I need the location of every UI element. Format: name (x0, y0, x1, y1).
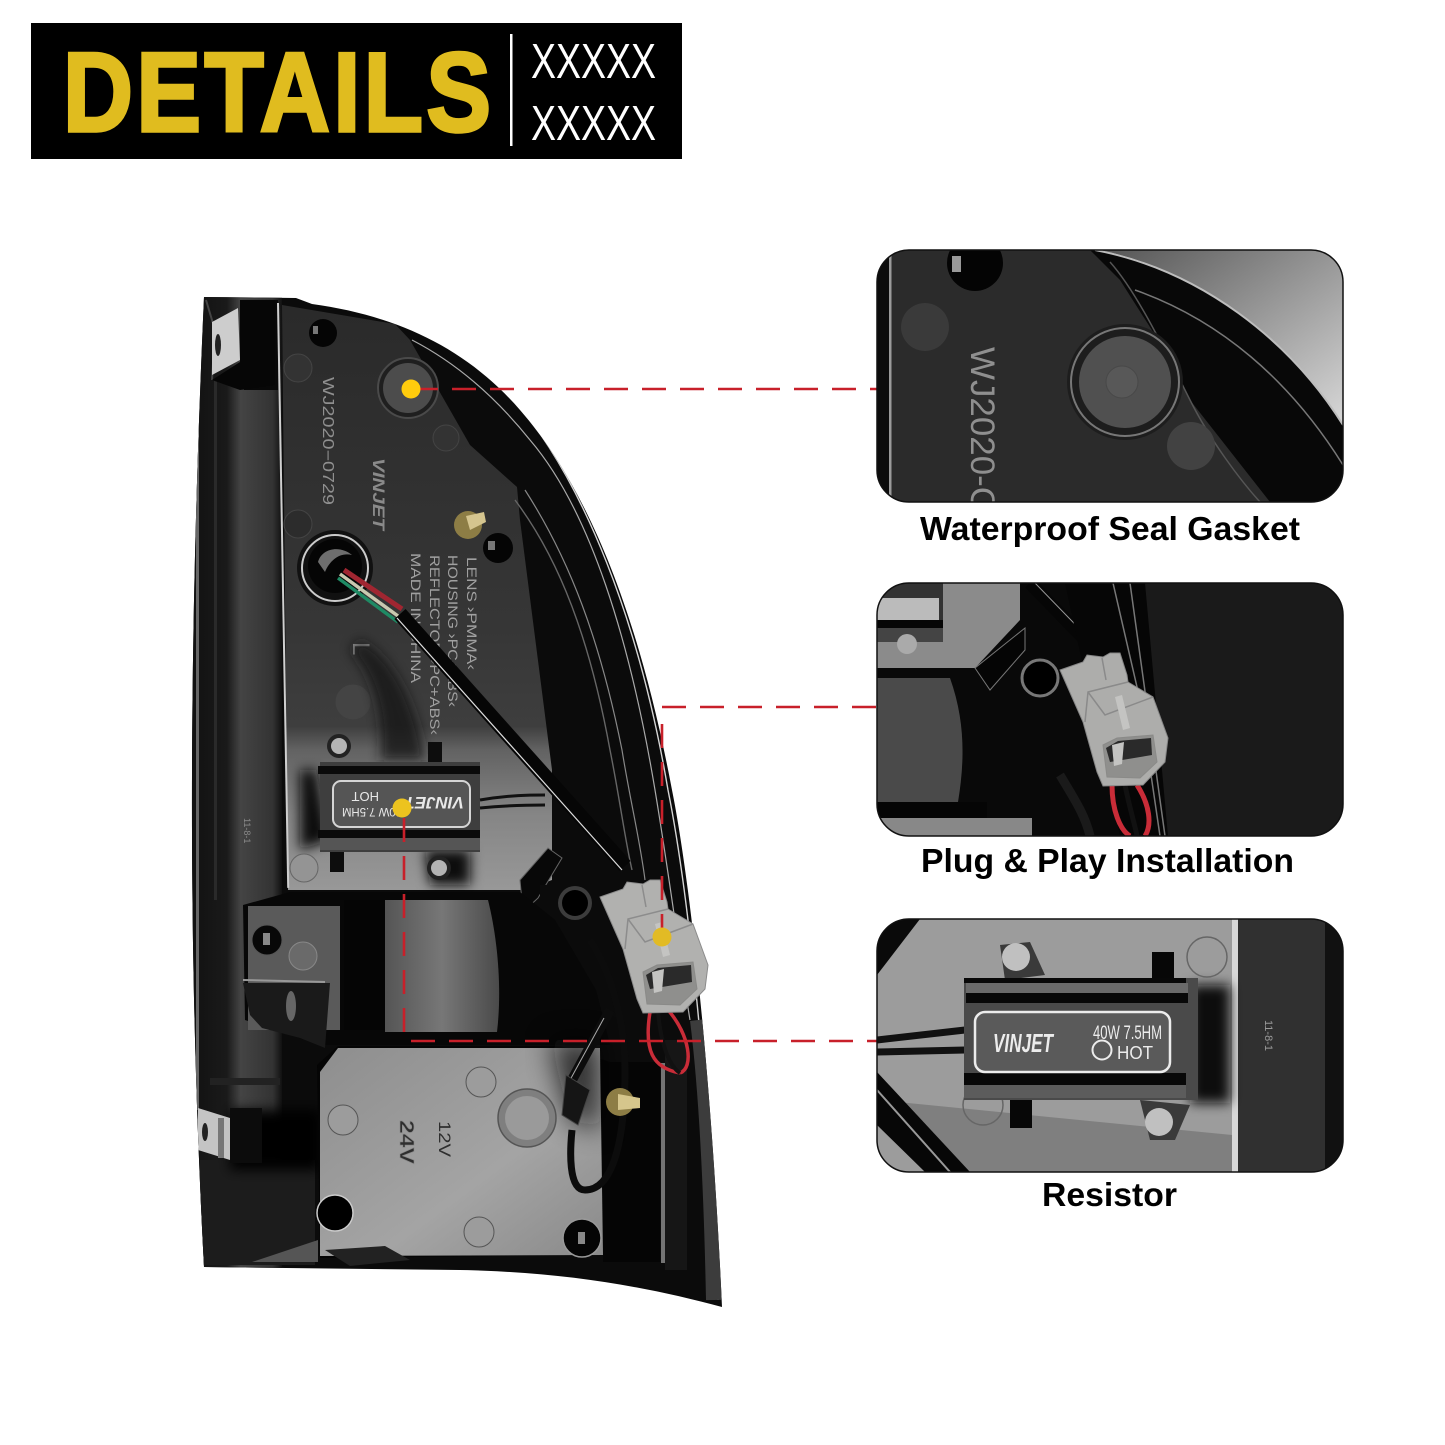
callout line: resistor (404, 818, 877, 1041)
tilted rib and socket (520, 848, 592, 920)
panel: resistor: 40W 7.5HM (1093, 1023, 1162, 1044)
left housing strip: 11-8-1 (242, 818, 252, 843)
wires (338, 570, 402, 622)
lower hinge (198, 1108, 262, 1163)
embossed material text: LENS ›PMMA‹ (464, 557, 479, 670)
title: DETAILS: DETAILS (63, 30, 494, 156)
header banner (31, 23, 682, 159)
panel: waterproof seal gasket (877, 235, 1343, 512)
resistor in housing: VINJET (403, 793, 464, 812)
marker dot: gasket (402, 380, 420, 398)
grey connector (600, 880, 708, 1013)
embossed material text: MADE IN CHINA (408, 553, 423, 683)
label: plug and play: Plug & Play Installation (921, 842, 1294, 879)
upper panel (282, 305, 552, 890)
label: resistor: Resistor (1042, 1176, 1177, 1213)
resistor in housing (290, 734, 545, 885)
placeholder text line 1: XXXXX (531, 35, 656, 89)
cable grommet (297, 530, 373, 606)
header divider (510, 34, 512, 146)
callout line: waterproof seal gasket (414, 388, 877, 390)
embossed material text: HOUSING ›PC+ABS‹ (445, 555, 460, 707)
left housing strip (190, 296, 320, 1271)
panel: resistor (877, 919, 1343, 1172)
product: tail light rear view (190, 296, 722, 1307)
stud nut (454, 511, 513, 563)
panel letter L: L (347, 642, 374, 655)
marker dot: resistor (392, 798, 412, 818)
placeholder text line 2: XXXXX (531, 97, 656, 151)
model code: WJ2020−0729 (319, 377, 336, 505)
bumps on upper panel (284, 354, 459, 719)
callout line: plug and play (662, 707, 877, 928)
panel: resistor: 11-8-1 (1262, 1020, 1274, 1051)
waterproof gasket (378, 358, 438, 418)
panel: resistor: VINJET (993, 1028, 1054, 1058)
embossed material text: REFLECTOR ›PC+ABS‹ (427, 555, 442, 735)
main cable (397, 614, 625, 870)
ground nut (606, 1088, 640, 1116)
marker dot: connector (652, 928, 672, 946)
connector red wires (648, 1010, 688, 1073)
lower panel: 12V (435, 1121, 454, 1158)
label: waterproof seal gasket: Waterproof Seal Gasket (920, 510, 1300, 547)
rim highlights (412, 340, 718, 1300)
lower panel (317, 1040, 687, 1270)
panel: resistor: HOT (1117, 1043, 1153, 1063)
embossed material text (408, 553, 479, 735)
resistor in housing: 40W 7.5HM (342, 805, 402, 819)
panel: waterproof seal gasket: WJ2020-C (963, 347, 1001, 512)
middle recessed housing (210, 892, 534, 1085)
rubber plug top (309, 319, 337, 347)
upper hinge (212, 300, 244, 390)
resistor in housing: HOT (352, 789, 379, 804)
braided harness and loop (562, 1018, 604, 1194)
embossed brand: VINJET (369, 458, 388, 532)
moulded shadow (350, 640, 425, 760)
panel: plug and play (877, 583, 1343, 836)
lower panel: 24V (395, 1120, 417, 1165)
